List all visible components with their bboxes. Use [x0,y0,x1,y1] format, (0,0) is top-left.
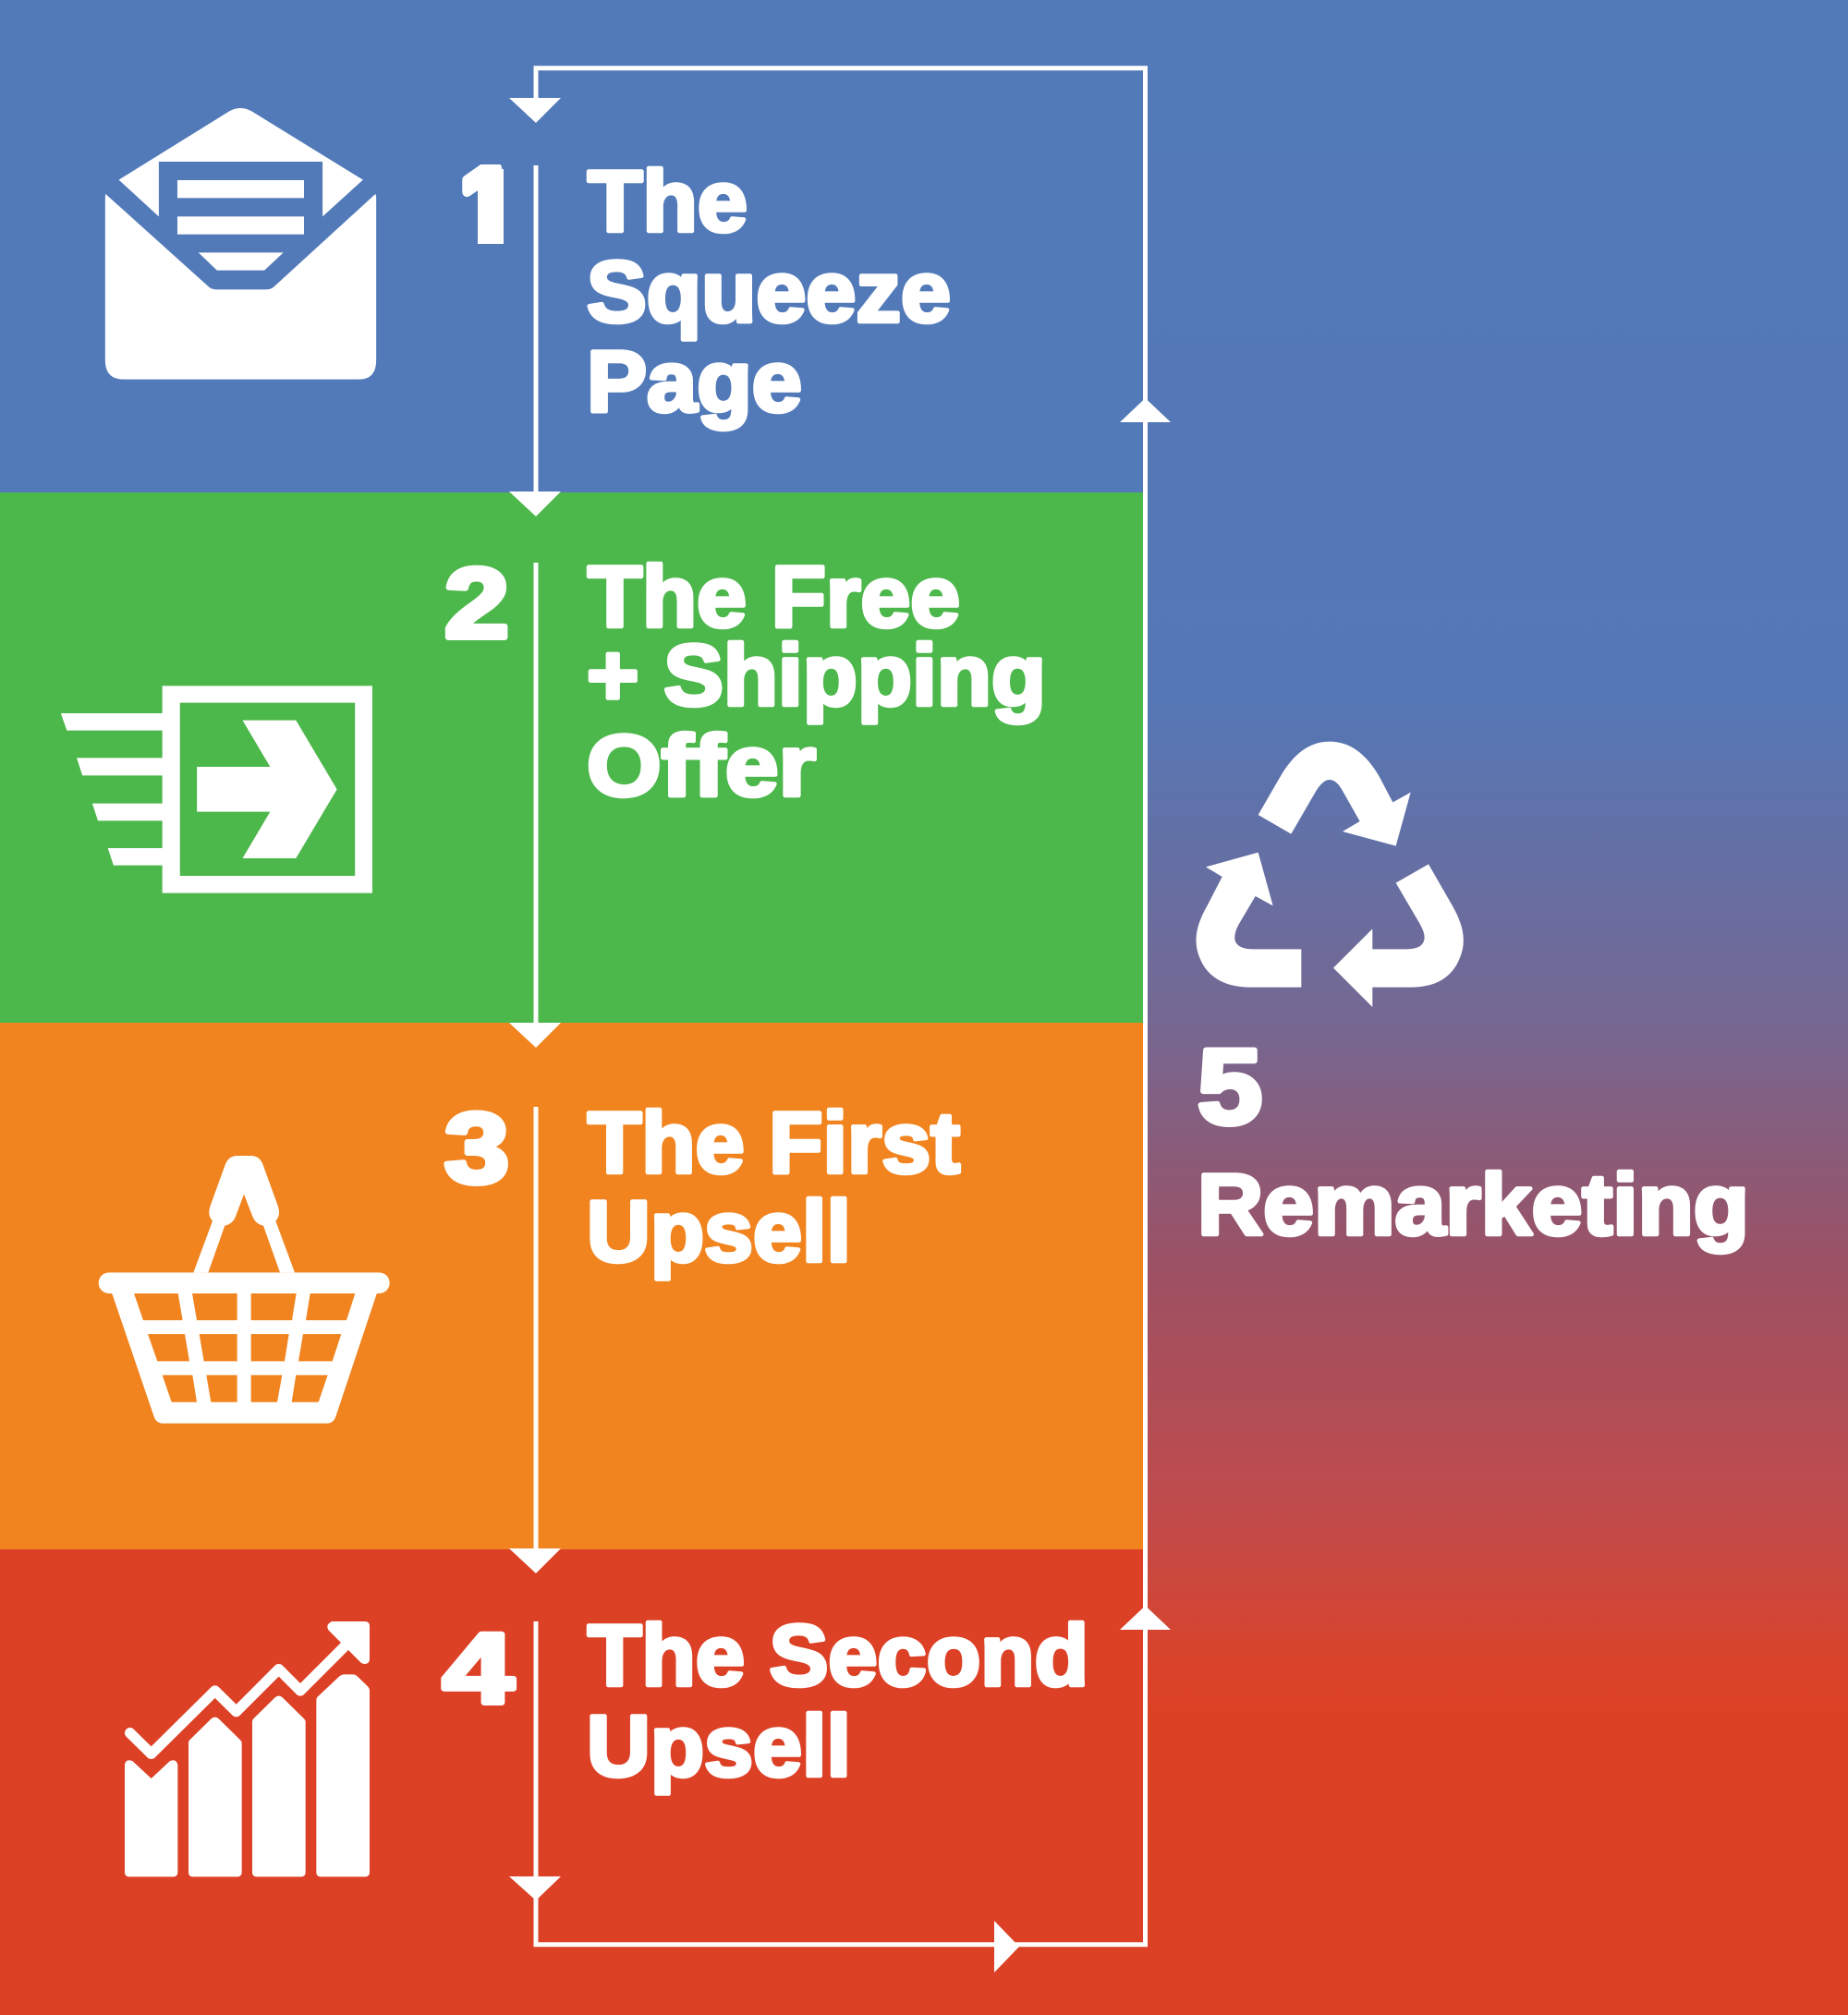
flow loop line [536,68,1146,1945]
panel: step 2 green band [0,492,1143,1023]
heading: The Second Upsell: The Second [588,1607,1088,1704]
number 5: 5 [1198,1028,1262,1147]
panel: step 3 orange band [0,1023,1143,1549]
number 1 [462,164,504,244]
arrow: step 1 to step 2 [509,492,561,516]
panel: step 4 red band [0,1549,1143,2015]
arrow: remarketing line up lower [1120,1606,1171,1630]
heading: The First Upsell [587,1094,960,1280]
heading: The Free + Shipping Offer: The Free [588,548,960,645]
arrow: top entry down [509,98,561,123]
heading: The Squeeze Page: The [588,152,748,249]
arrow: bottom line right [994,1921,1019,1973]
arrow: step 4 down [509,1876,561,1900]
heading: The Free + Shipping Offer: Offer [587,717,816,814]
heading: The First Upsell: The First [588,1094,960,1191]
heading: The First Upsell: Upsell [587,1183,851,1280]
arrow: step 2 to step 3 [509,1023,561,1048]
heading: The Squeeze Page [587,152,951,430]
icon: rising bar chart [125,1621,370,1876]
number 1: 1 [460,145,516,265]
flow line segments between steps [534,165,538,1876]
heading: The Second Upsell: Upsell [587,1697,851,1794]
arrow: step 3 to step 4 [509,1548,561,1573]
panel: step 1 blue band [0,0,1143,492]
icon: exit arrow with speed lines [61,686,372,893]
heading: The Second Upsell [587,1607,1088,1794]
heading: The Squeeze Page: Squeeze [587,243,951,340]
icon: open envelope [105,108,376,380]
heading: The Free + Shipping Offer [587,548,1046,814]
heading: The Squeeze Page: Page [587,333,802,430]
arrow: remarketing line up upper [1120,398,1171,422]
number 2: 2 [444,547,509,659]
heading: The Free + Shipping Offer: + Shipping [587,626,1046,723]
icon: shopping basket [99,1156,390,1424]
number 4: 4 [443,1612,514,1724]
icon: recycle arrows [1197,742,1464,1007]
heading: Remarketing: Remarketing [1198,1156,1749,1253]
number 3: 3 [444,1092,509,1204]
